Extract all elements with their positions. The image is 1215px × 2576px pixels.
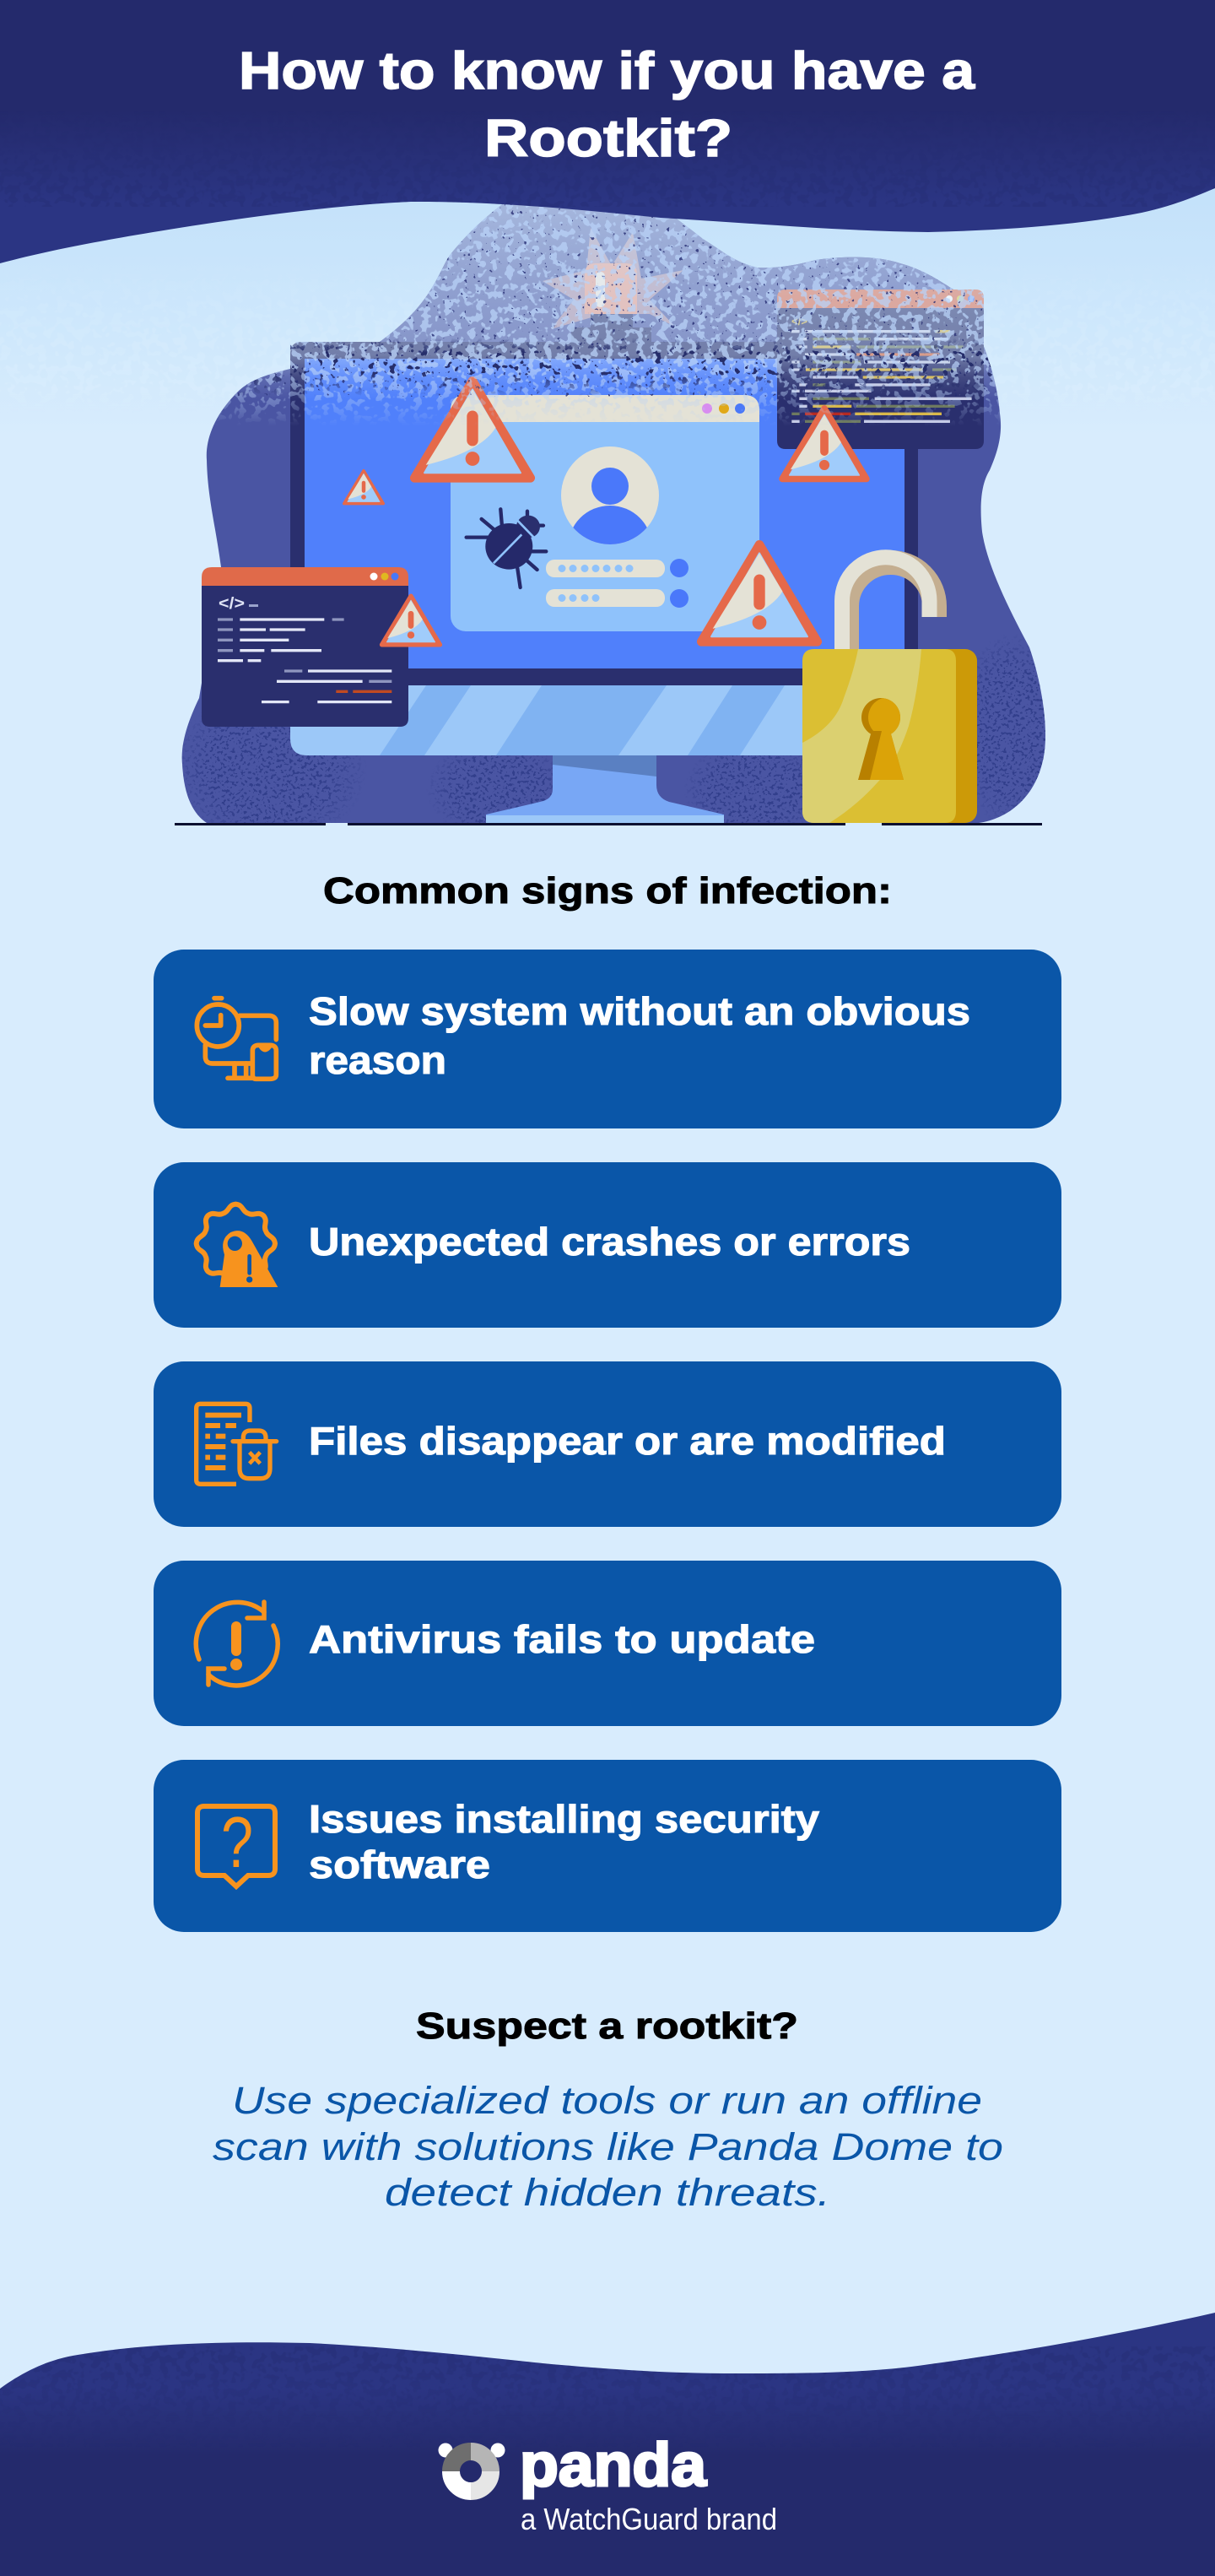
mist fade over top of illustration — [218, 204, 1001, 422]
code window right: </> — [791, 315, 807, 327]
card: files — [154, 1361, 1061, 1527]
padlock — [802, 557, 977, 823]
label — [309, 1797, 819, 1886]
password fields — [546, 559, 688, 608]
advice text: Use specialized tools or run an offline — [232, 2079, 982, 2122]
icon: question bubble — [197, 1803, 275, 1886]
tagline: a WatchGuard brand — [521, 2502, 777, 2536]
warning triangle on code window — [382, 596, 440, 645]
logo: panda — [439, 2432, 777, 2536]
footer wave — [0, 2313, 1215, 2576]
icon: gear with warning — [197, 1204, 278, 1287]
heading: suspect a rootkit: Suspect a rootkit? — [416, 2005, 798, 2047]
icon: bug — [467, 509, 546, 587]
monitor stand — [486, 755, 724, 823]
label: Issues installing security — [309, 1797, 819, 1841]
background tint under header wave — [0, 188, 1215, 354]
floor line — [175, 823, 1042, 825]
label: Antivirus fails to update — [309, 1617, 815, 1661]
stand shadow — [553, 751, 656, 777]
card: slow system — [154, 950, 1061, 1128]
advice text — [213, 2079, 1003, 2214]
icon: update alert — [196, 1602, 278, 1686]
card: crashes — [154, 1162, 1061, 1328]
label: Slow system without an obvious — [309, 989, 970, 1033]
card: issues installing — [154, 1760, 1061, 1932]
header wave — [0, 0, 1215, 263]
login window — [451, 395, 759, 631]
monitor frame and screen — [290, 342, 918, 685]
icon: panda ring — [439, 2443, 505, 2492]
monitor chin with stripes — [290, 675, 918, 755]
icon: document and bin — [197, 1404, 277, 1484]
code window right — [777, 290, 984, 449]
illustration: infected computer with warnings and open padlock — [169, 190, 1063, 827]
blob stipple shading — [182, 643, 1045, 823]
icon: question bubble: ? — [221, 1803, 253, 1883]
title: Rootkit? — [484, 110, 732, 168]
warning triangle large bottom — [701, 544, 818, 641]
warning triangle large top — [414, 381, 531, 478]
advice text: scan with solutions like Panda Dome to — [213, 2125, 1003, 2168]
card: antivirus — [154, 1561, 1061, 1726]
code window left: </> — [219, 595, 245, 613]
icon: clock and devices — [197, 998, 276, 1079]
code window left — [202, 567, 408, 727]
alarm siren — [543, 228, 683, 342]
label: Files disappear or are modified — [309, 1419, 946, 1463]
warning triangle small — [344, 471, 383, 504]
label — [309, 989, 970, 1082]
label: reason — [309, 1038, 446, 1082]
advice text: detect hidden threats. — [385, 2171, 830, 2214]
label: software — [309, 1843, 490, 1886]
blob backdrop — [182, 190, 1045, 823]
title — [239, 42, 975, 168]
warning triangle top right — [782, 409, 867, 479]
label: Unexpected crashes or errors — [309, 1220, 910, 1264]
user avatar — [561, 446, 659, 544]
wordmark: panda — [520, 2432, 707, 2499]
title: How to know if you have a — [239, 42, 975, 100]
stand base strip — [486, 815, 724, 823]
heading: common signs: Common signs of infection: — [323, 870, 892, 912]
